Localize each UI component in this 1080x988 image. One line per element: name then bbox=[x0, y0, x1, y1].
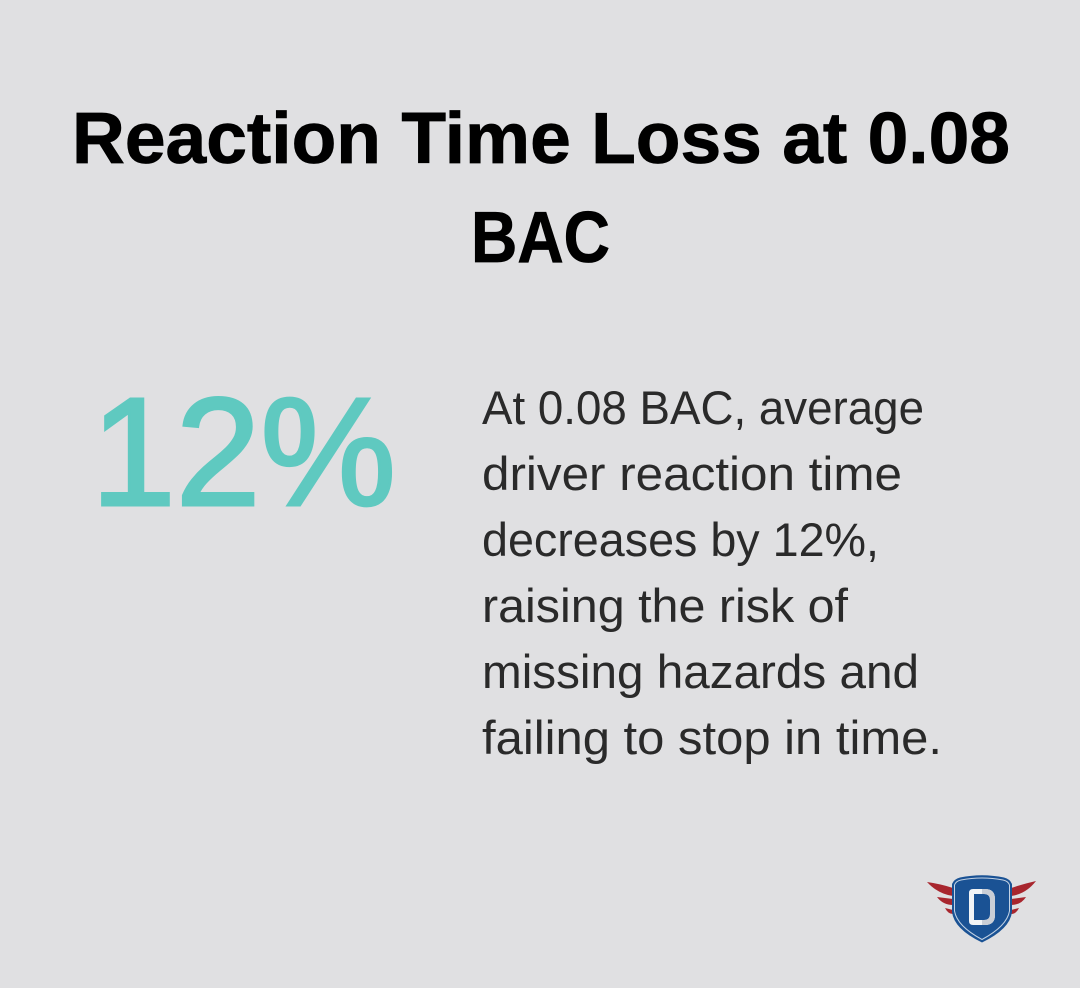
icon: shield logo with wings bbox=[927, 875, 1036, 942]
description text block bbox=[482, 382, 942, 765]
title: BAC bbox=[471, 198, 610, 278]
description text block: failing to stop in time. bbox=[482, 712, 942, 765]
letter D bbox=[969, 889, 995, 925]
letter D shaded half bbox=[982, 889, 995, 925]
description text block: decreases by 12%, bbox=[482, 514, 879, 567]
description text block: raising the risk of bbox=[482, 580, 849, 633]
shield bbox=[952, 875, 1012, 942]
title bbox=[72, 99, 1010, 278]
description text block: driver reaction time bbox=[482, 448, 902, 501]
title: Reaction Time Loss at 0.08 bbox=[72, 99, 1010, 179]
description text block: missing hazards and bbox=[482, 646, 919, 699]
big statistic: 12%: 12% bbox=[91, 366, 396, 538]
right wing bbox=[1011, 881, 1036, 914]
left wing bbox=[927, 882, 953, 914]
description text block: At 0.08 BAC, average bbox=[482, 382, 924, 435]
